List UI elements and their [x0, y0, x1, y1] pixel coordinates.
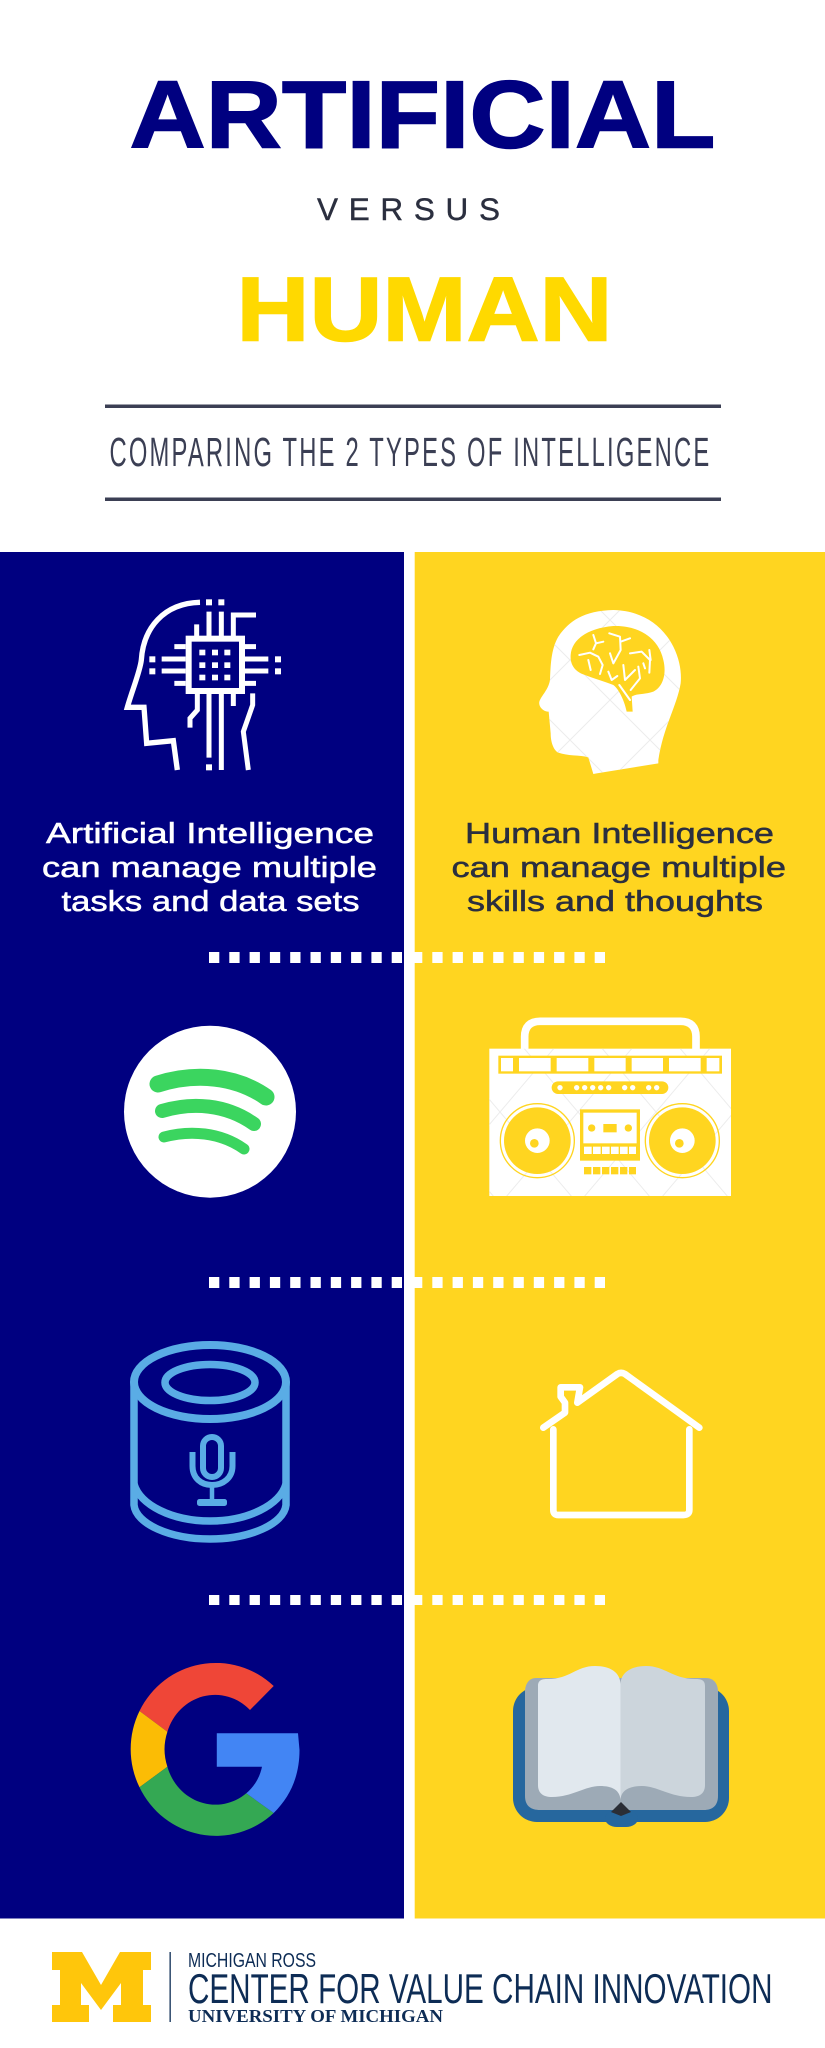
text: artificial intelligence description: Artificial Intelligence — [46, 818, 374, 850]
icon: open book — [513, 1666, 729, 1827]
logo: block M — [52, 1952, 151, 2022]
divider: dotted row 3 — [209, 1595, 605, 1605]
heading: HUMAN: HUMAN — [236, 260, 612, 360]
text: artificial intelligence description: can manage multiple — [42, 852, 377, 884]
text: university of michigan: UNIVERSITY OF MICHIGAN — [188, 2006, 443, 2026]
icon: house outline — [543, 1373, 699, 1515]
footer logo block — [52, 1950, 772, 2026]
icon: human head with brain — [539, 610, 681, 774]
subtitle: COMPARING THE 2 TYPES OF INTELLIGENCE — [110, 431, 709, 476]
divider: dotted row 1 — [209, 952, 605, 963]
panel: human intelligence column — [415, 552, 825, 1918]
heading: VERSUS: VERSUS — [317, 191, 500, 227]
icon: boombox — [489, 1021, 731, 1196]
icon: AI head with chip — [127, 599, 281, 770]
text: artificial intelligence description — [42, 818, 377, 918]
panel: artificial intelligence column — [0, 552, 404, 1918]
icon: spotify logo — [124, 1026, 296, 1198]
title header — [105, 62, 721, 501]
text: human intelligence description: can manage multiple — [452, 852, 786, 884]
divider: dotted row 2 — [209, 1277, 605, 1288]
text: artificial intelligence description: tasks and data sets — [62, 886, 360, 918]
text: human intelligence description — [452, 818, 786, 918]
text: human intelligence description: Human Intelligence — [465, 818, 774, 850]
heading: ARTIFICIAL: ARTIFICIAL — [130, 62, 716, 168]
icon: google G — [131, 1663, 300, 1836]
text: michigan ross: MICHIGAN ROSS — [188, 1950, 316, 1972]
icon: smart speaker — [134, 1345, 286, 1539]
text: human intelligence description: skills and thoughts — [467, 886, 763, 918]
